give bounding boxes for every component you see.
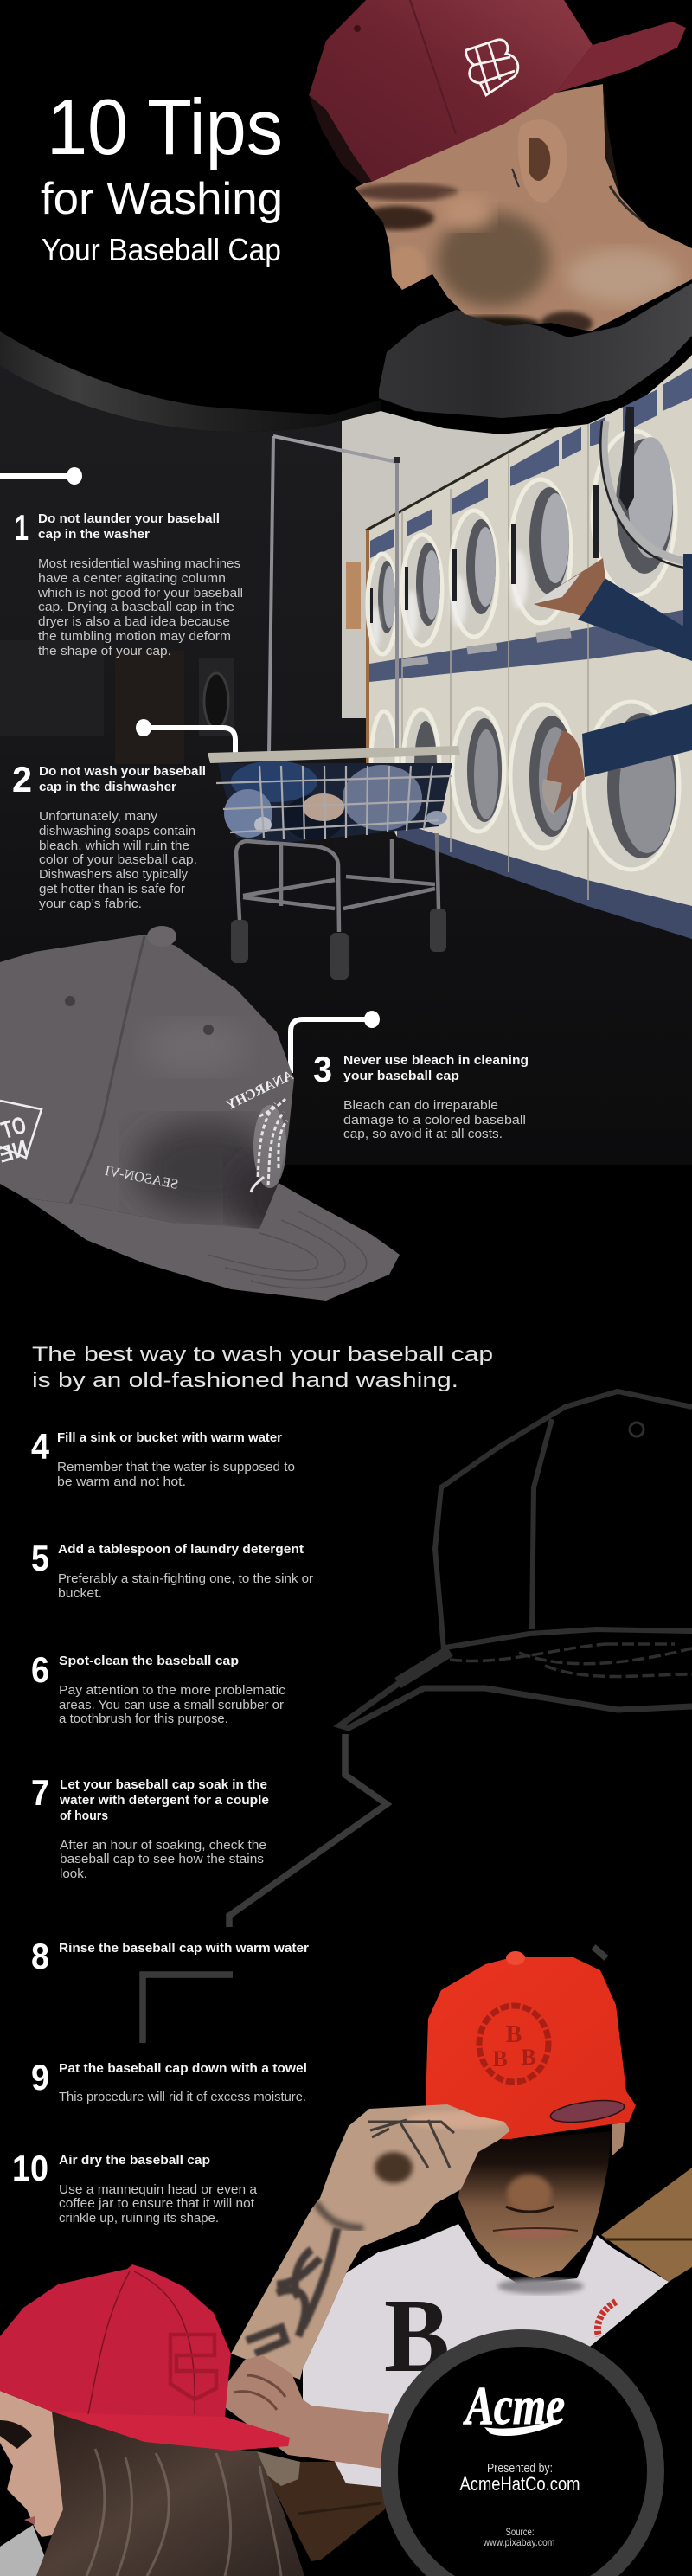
tip 2: your cap’s fabric. <box>39 897 142 911</box>
tip 8 <box>31 1936 309 1976</box>
gray baseball cap <box>0 926 400 1301</box>
title: for Washing <box>41 174 283 224</box>
section heading: is by an old-fashioned hand washing. <box>32 1369 458 1392</box>
tip 2: 2 <box>12 759 32 800</box>
tip 6: 6 <box>31 1649 49 1690</box>
tip 2: Unfortunately, many <box>39 810 158 824</box>
legs and shoes <box>534 554 692 815</box>
tip 10: coffee jar to ensure that it will not <box>59 2197 254 2211</box>
connector line 1 <box>0 467 82 485</box>
tip 10 <box>12 2148 258 2226</box>
gray wall corner <box>0 2525 52 2576</box>
tip 4: 4 <box>31 1426 50 1467</box>
tip 1: which is not good for your baseball <box>37 587 243 601</box>
footer circle: AcmeHatCo.com <box>460 2473 580 2495</box>
tip 3: your baseball cap <box>343 1070 459 1083</box>
tip 1: the shape of your cap. <box>38 645 171 658</box>
middle control band <box>369 608 692 682</box>
footer circle: Presented by: <box>487 2461 553 2476</box>
title: Your Baseball Cap <box>42 232 281 267</box>
red cap: B <box>492 2046 508 2072</box>
tip 8: 8 <box>31 1936 49 1976</box>
tip 7: of hours <box>60 1809 108 1823</box>
tip 9 <box>31 2057 307 2104</box>
tip 3: Never use bleach in cleaning <box>343 1054 529 1068</box>
tip 2: get hotter than is safe for <box>39 883 185 896</box>
tip 3: damage to a colored baseball <box>343 1114 526 1127</box>
tip 1: cap. Drying a baseball cap in the <box>38 601 234 614</box>
white t-shirt <box>303 2224 669 2488</box>
crest emblem <box>170 2335 216 2399</box>
tip 4: Remember that the water is supposed to <box>57 1461 295 1474</box>
tip 5: Preferably a stain-fighting one, to the sink or <box>58 1572 313 1586</box>
tip 4: Fill a sink or bucket with warm water <box>57 1431 282 1445</box>
right ear <box>612 2123 625 2156</box>
tip 5 <box>31 1538 313 1601</box>
seams <box>402 415 588 900</box>
tip 1: have a center agitating column <box>38 572 226 586</box>
poster <box>346 562 361 629</box>
tip 10: 10 <box>12 2148 48 2188</box>
tip 2: Do not wash your baseball <box>39 765 206 779</box>
panel: laundromat photo <box>0 346 692 1165</box>
tip 5: bucket. <box>58 1587 102 1601</box>
tip 7: water with detergent for a couple <box>59 1794 269 1808</box>
hair <box>36 2412 304 2576</box>
tip 2: color of your baseball cap. <box>39 853 197 867</box>
ear <box>512 119 567 203</box>
tip 3 <box>313 1049 529 1141</box>
tip 2: dishwashing soaps contain <box>39 825 195 838</box>
connector line 3 <box>291 1011 380 1073</box>
crimson cap <box>0 2264 290 2449</box>
tip 6: Spot-clean the baseball cap <box>59 1654 239 1668</box>
tip 8: Rinse the baseball cap with warm water <box>59 1942 309 1956</box>
laurel <box>598 2302 616 2336</box>
tip 4: be warm and not hot. <box>57 1475 186 1489</box>
gray cap brim <box>26 1183 400 1301</box>
cap embroidery: ANARCHY <box>223 1068 296 1114</box>
tip 2: cap in the dishwasher <box>39 781 176 794</box>
cap embroidery: SEASON-VI <box>104 1164 179 1192</box>
section heading <box>32 1343 493 1392</box>
tip 9: 9 <box>31 2057 49 2097</box>
laundry basket <box>208 436 460 980</box>
tip 3: Bleach can do irreparable <box>343 1099 498 1113</box>
tip 7: look. <box>60 1867 87 1881</box>
woman face <box>0 2391 63 2537</box>
photo: man in red cap <box>225 1951 692 2561</box>
dark laundromat interior <box>0 346 692 1165</box>
tip 10: Air dry the baseball cap <box>59 2154 210 2168</box>
tip 6 <box>31 1649 285 1726</box>
basket wheels <box>231 909 446 980</box>
panel: title circle header <box>0 0 692 434</box>
tip 1: 1 <box>15 507 29 548</box>
tattooed arm and hand <box>225 2098 519 2384</box>
connector zigzag line <box>143 1734 606 2043</box>
shirt letter: B <box>384 2277 450 2394</box>
tip 2: bleach, which will ruin the <box>39 839 189 853</box>
tip 2 <box>12 759 206 911</box>
tip 5: Add a tablespoon of laundry detergent <box>58 1543 304 1557</box>
cap outline illustration <box>340 1391 692 1728</box>
grey t-shirt <box>379 283 692 418</box>
tip 7: Let your baseball cap soak in the <box>60 1778 267 1792</box>
section heading: The best way to wash your baseball cap <box>32 1343 493 1366</box>
woman hand and forearm <box>225 2355 389 2469</box>
title: 10 Tips <box>47 84 283 171</box>
top control panels <box>370 368 692 558</box>
washing machines <box>346 350 692 939</box>
tip 1: dryer is also a bad idea because <box>38 615 230 629</box>
red cap: B <box>506 2021 522 2048</box>
laundry in basket <box>218 761 452 844</box>
tip 10: Use a mannequin head or even a <box>59 2183 258 2197</box>
tip 3: 3 <box>313 1049 332 1089</box>
hair <box>458 84 649 228</box>
man in maroon cap <box>309 0 692 418</box>
tip 4 <box>31 1426 295 1489</box>
maroon snapback cap <box>309 0 686 183</box>
lower drums <box>371 702 679 870</box>
footer circle: Source: <box>505 2526 535 2538</box>
tip 6: areas. You can use a small scrubber or <box>59 1699 284 1712</box>
cap embroidery <box>0 1068 296 1192</box>
tip 2: Dishwashers also typically <box>39 868 189 882</box>
connector line 2 <box>136 719 235 755</box>
wood background <box>260 2168 692 2561</box>
large open door ring <box>604 421 692 562</box>
tip 6: Pay attention to the more problematic <box>59 1684 285 1698</box>
tip 7 <box>31 1772 269 1881</box>
title <box>41 84 283 267</box>
red cap <box>426 1951 636 2139</box>
tip 9: This procedure will rid it of excess moisture. <box>59 2091 306 2104</box>
tip 1: Most residential washing machines <box>38 557 240 571</box>
footer circle <box>389 2338 656 2576</box>
red cap: B <box>521 2045 536 2070</box>
tip 10: crinkle up, ruining its shape. <box>59 2212 219 2226</box>
tattooed elbow <box>257 2451 300 2486</box>
Acme logo: Acme <box>463 2377 565 2436</box>
tip 7: After an hour of soaking, check the <box>60 1839 266 1853</box>
wall <box>342 411 548 718</box>
tip 6: a toothbrush for this purpose. <box>59 1712 228 1726</box>
tip 1: the tumbling motion may deform <box>38 630 231 644</box>
tip 3: cap, so avoid it at all costs. <box>343 1127 503 1141</box>
upper drums <box>368 431 676 654</box>
tip 1: cap in the washer <box>38 528 150 542</box>
woman in red cap <box>0 2264 389 2576</box>
tip 7: 7 <box>31 1772 49 1813</box>
BB logo <box>466 40 518 95</box>
tip 1 <box>15 507 243 658</box>
tip 1: Do not launder your baseball <box>38 512 220 526</box>
footer circle: www.pixabay.com <box>483 2536 555 2548</box>
base band <box>397 822 692 939</box>
face <box>458 2131 612 2278</box>
neck and face <box>355 84 692 336</box>
tip 7: baseball cap to see how the stains <box>60 1853 264 1866</box>
tip 9: Pat the baseball cap down with a towel <box>59 2062 307 2076</box>
tip 5: 5 <box>31 1538 49 1578</box>
